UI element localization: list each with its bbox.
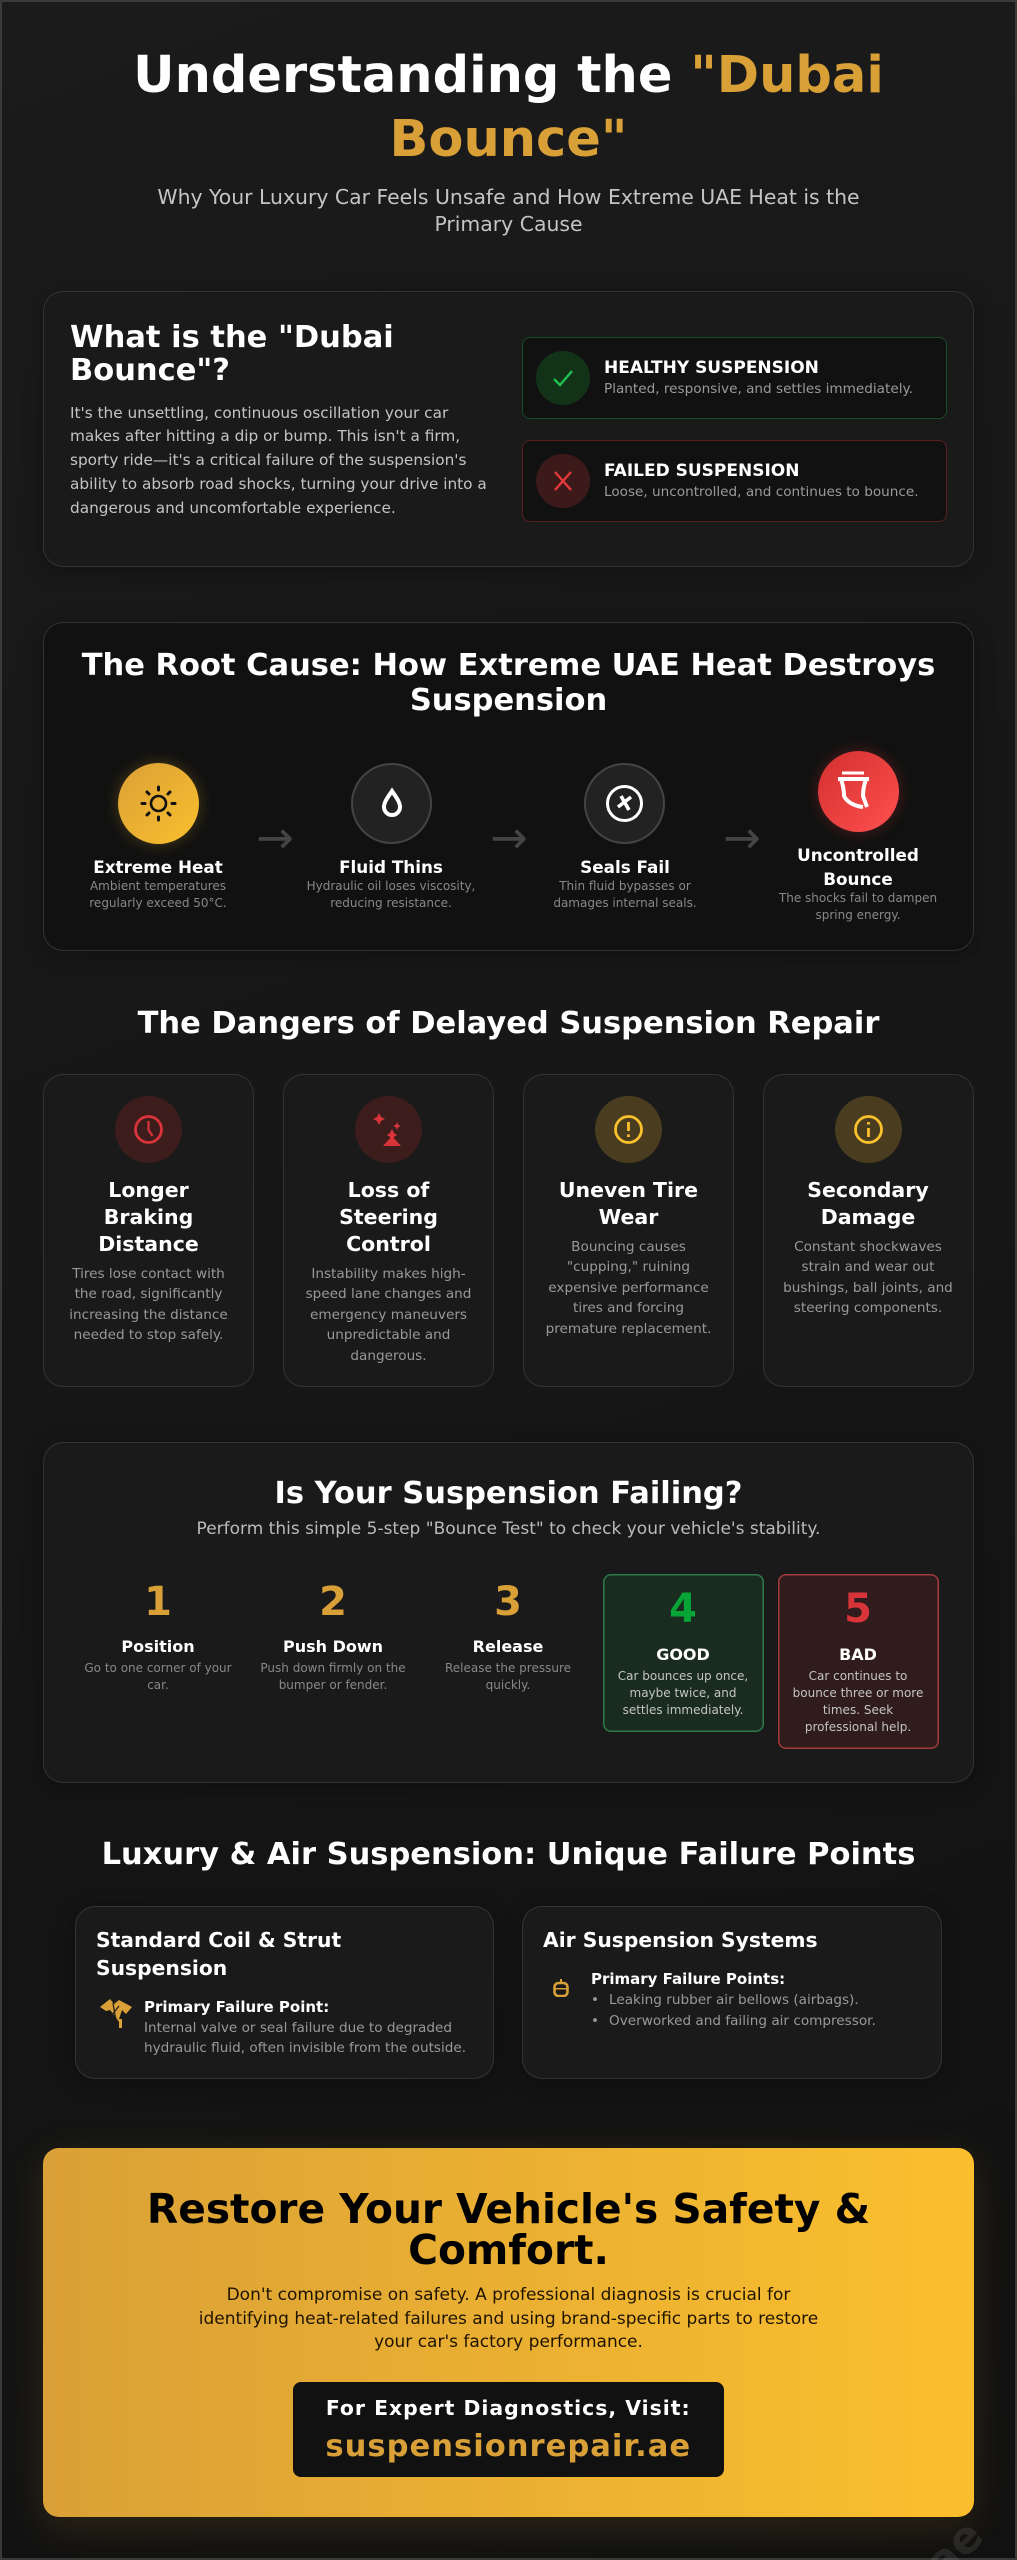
title: Longer — [108, 1178, 189, 1202]
text: definition: It's the unsettling, continuous oscillation your car — [70, 404, 448, 422]
description — [618, 1668, 748, 1716]
description: fluid thins — [307, 879, 475, 910]
card: longer braking distance — [43, 1074, 254, 1387]
step icon: bounce — [818, 751, 899, 832]
step icon: sun — [118, 763, 199, 844]
icon: check — [536, 351, 590, 405]
label: uncontrolled bounce: Uncontrolled — [797, 845, 919, 865]
title: Uneven Tire — [559, 1178, 698, 1202]
description — [144, 2020, 466, 2056]
description — [793, 1668, 923, 1734]
description: speed lane changes and — [306, 1286, 471, 1302]
description: uncontrolled bounce: spring energy. — [815, 908, 901, 922]
description: "cupping," ruining — [567, 1259, 690, 1275]
bullet 1: • — [591, 1992, 599, 2008]
description: dangerous. — [350, 1348, 427, 1364]
title — [133, 46, 884, 168]
title: Control — [346, 1232, 431, 1256]
label: Push Down — [283, 1637, 383, 1656]
panel: bounce test — [43, 1442, 974, 1783]
panel: what is the dubai bounce — [43, 291, 974, 567]
text: call to action: Don't compromise on safety. A professional diagnosis is crucial for — [227, 2285, 790, 2305]
icon: info — [835, 1096, 902, 1163]
card: failed suspension — [522, 440, 947, 522]
heading: is your suspension failing: Is Your Suspension Failing? — [275, 1476, 742, 1511]
label: extreme heat: Extreme Heat — [93, 857, 223, 877]
description: needed to stop safely. — [74, 1327, 223, 1343]
description — [69, 1266, 228, 1343]
title — [339, 1178, 438, 1256]
description — [783, 1239, 953, 1316]
arrow 3: → — [723, 811, 761, 864]
description — [260, 1660, 406, 1692]
description: fluid thins: reducing resistance. — [330, 896, 452, 910]
description: settles immediately. — [623, 1702, 743, 1716]
panel: call to action — [43, 2148, 974, 2517]
card: standard coil and strut — [75, 1906, 494, 2079]
icon: clock — [115, 1096, 182, 1163]
title: Secondary — [807, 1178, 929, 1202]
description — [546, 1239, 711, 1337]
description: seals fail: damages internal seals. — [553, 896, 697, 910]
arrow 1: → — [256, 811, 294, 864]
heading: what is: What is the "Dubai — [70, 320, 394, 354]
description: bushings, ball joints, and — [783, 1280, 953, 1296]
label: failed: FAILED SUSPENSION — [604, 461, 799, 481]
step 2 — [260, 1579, 406, 1692]
description: Car bounces up once, — [618, 1668, 748, 1682]
step icon: seal — [584, 763, 665, 844]
step 1 — [84, 1579, 232, 1692]
title: Bounce" — [390, 110, 627, 168]
step 3 — [445, 1579, 571, 1692]
title: Braking — [104, 1205, 193, 1229]
title: Wear — [599, 1205, 658, 1229]
description: Internal valve or seal failure due to degraded — [144, 2020, 452, 2036]
description: times. Seek — [823, 1702, 893, 1716]
title: Standard Coil & Strut — [96, 1928, 341, 1952]
heading: what is — [70, 320, 394, 388]
label: Primary Failure Points: — [591, 1970, 785, 1988]
bullet list — [591, 1992, 876, 2028]
description: Bouncing causes — [571, 1239, 686, 1255]
number: 1 — [144, 1579, 172, 1625]
description: healthy: Planted, responsive, and settles immediately. — [604, 381, 913, 397]
label: Release — [473, 1637, 543, 1656]
description — [445, 1660, 571, 1692]
text: call to action: your car's factory performance. — [374, 2332, 643, 2352]
description: seals fail: Thin fluid bypasses or — [559, 879, 691, 893]
number: 2 — [319, 1579, 347, 1625]
panel: root cause — [43, 622, 974, 951]
text 2: Overworked and failing air compressor. — [609, 2012, 876, 2028]
card: secondary damage — [762, 1074, 974, 1387]
icon: sparkles — [355, 1096, 422, 1163]
text: definition: sporty ride—it's a critical failure of the suspension's — [70, 451, 466, 469]
heading: dangers: The Dangers of Delayed Suspension Repair — [138, 1006, 879, 1041]
subheading: bounce test: Perform this simple 5-step "Bounce Test" to check your vehicle's stability. — [197, 1519, 820, 1539]
label: Primary Failure Point: — [144, 1998, 329, 2016]
contact box — [292, 2382, 724, 2477]
text: visit: For Expert Diagnostics, Visit: — [326, 2396, 691, 2420]
description: bumper or fender. — [279, 1678, 387, 1692]
label: fluid thins: Fluid Thins — [339, 857, 443, 877]
heading: root cause: The Root Cause: How Extreme UAE Heat Destroys — [82, 648, 935, 683]
icon: alert — [595, 1096, 662, 1163]
description: tires and forcing — [573, 1300, 684, 1316]
description: uncontrolled bounce — [778, 891, 937, 922]
description: extreme heat — [89, 879, 227, 910]
text: call to action — [199, 2285, 818, 2352]
number: 5 — [844, 1586, 872, 1632]
card: uneven tire wear — [523, 1074, 734, 1387]
title — [807, 1178, 929, 1229]
description: professional help. — [805, 1720, 911, 1734]
description: Release the pressure — [445, 1660, 571, 1674]
text: definition: ability to absorb road shocks, turning your drive into a — [70, 475, 487, 493]
description: Constant shockwaves — [794, 1239, 942, 1255]
step 4: good result — [603, 1574, 764, 1732]
description: hydraulic fluid, often invisible from the outside. — [144, 2040, 466, 2056]
number: 4 — [669, 1586, 697, 1632]
description: expensive performance — [548, 1280, 709, 1296]
subtitle — [157, 184, 860, 236]
text: website: suspensionrepair.ae — [325, 2429, 691, 2464]
card: air suspension systems — [522, 1906, 942, 2079]
description: quickly. — [486, 1678, 530, 1692]
step icon: drop — [351, 763, 432, 844]
description: fluid thins: Hydraulic oil loses viscosity, — [307, 879, 475, 893]
icon: cross — [536, 454, 590, 508]
bullet 2: • — [591, 2012, 599, 2028]
description: extreme heat: regularly exceed 50°C. — [89, 896, 227, 910]
description: premature replacement. — [546, 1321, 711, 1337]
card: loss of steering control — [283, 1074, 494, 1387]
title — [98, 1178, 199, 1256]
heading: what is: Bounce"? — [70, 353, 230, 388]
card: healthy suspension — [522, 337, 947, 419]
description: Go to one corner of your — [84, 1660, 232, 1674]
label: seals fail: Seals Fail — [580, 857, 670, 877]
description: uncontrolled bounce: The shocks fail to dampen — [779, 891, 937, 905]
text: definition: makes after hitting a dip or bump. This isn't a firm, — [70, 427, 460, 445]
heading: luxury and air suspension: Luxury & Air Suspension: Unique Failure Points — [102, 1837, 915, 1872]
label: healthy: HEALTHY SUSPENSION — [604, 358, 819, 378]
title: Distance — [98, 1232, 199, 1256]
subtitle: Primary Cause — [434, 212, 583, 236]
title: Loss of — [348, 1178, 429, 1202]
description: Car continues to — [809, 1668, 907, 1682]
description: unpredictable and — [327, 1327, 450, 1343]
description: emergency maneuvers — [310, 1307, 467, 1323]
title: Air Suspension Systems — [543, 1928, 818, 1952]
description: Push down firmly on the — [260, 1660, 406, 1674]
arrow 2: → — [490, 811, 528, 864]
text 1: Leaking rubber air bellows (airbags). — [609, 1992, 859, 2008]
heading: restore — [147, 2185, 870, 2274]
title: Suspension — [96, 1956, 227, 1980]
step 5: bad result — [778, 1574, 939, 1749]
description: Tires lose contact with — [72, 1266, 225, 1282]
description: bounce three or more — [793, 1686, 923, 1700]
title — [559, 1178, 698, 1229]
icon: air compressor — [553, 1979, 569, 1997]
description: increasing the distance — [69, 1307, 228, 1323]
text: call to action: identifying heat-related failures and using brand-specific parts to restore — [199, 2309, 818, 2329]
label: BAD — [839, 1645, 877, 1664]
label: uncontrolled bounce — [797, 845, 919, 889]
title: Damage — [821, 1205, 915, 1229]
heading: root cause: Suspension — [410, 683, 607, 718]
title: Steering — [339, 1205, 438, 1229]
label: uncontrolled bounce: Bounce — [823, 869, 893, 889]
description: failed: Loose, uncontrolled, and continues to bounce. — [604, 484, 919, 500]
title — [96, 1928, 341, 1980]
number: 3 — [494, 1579, 522, 1625]
text: definition — [70, 404, 487, 517]
description: steering components. — [794, 1300, 942, 1316]
label: Position — [121, 1637, 195, 1656]
description: seals fail — [553, 879, 697, 910]
label: GOOD — [656, 1645, 710, 1664]
text: definition: dangerous and uncomfortable experience. — [70, 499, 396, 517]
title: Understanding the "Dubai — [133, 46, 884, 105]
heading: root cause — [82, 648, 935, 718]
description — [84, 1660, 232, 1692]
description: car. — [147, 1678, 169, 1692]
description: the road, significantly — [75, 1286, 222, 1302]
icon: failure point — [100, 1999, 132, 2028]
subtitle: Why Your Luxury Car Feels Unsafe and How Extreme UAE Heat is the — [157, 184, 860, 208]
heading: restore: Restore Your Vehicle's Safety & — [147, 2185, 870, 2233]
description: maybe twice, and — [630, 1686, 736, 1700]
description: strain and wear out — [802, 1259, 934, 1275]
description — [306, 1266, 471, 1364]
description: Instability makes high- — [311, 1266, 466, 1282]
description: extreme heat: Ambient temperatures — [90, 879, 226, 893]
heading: restore: Comfort. — [408, 2226, 609, 2274]
